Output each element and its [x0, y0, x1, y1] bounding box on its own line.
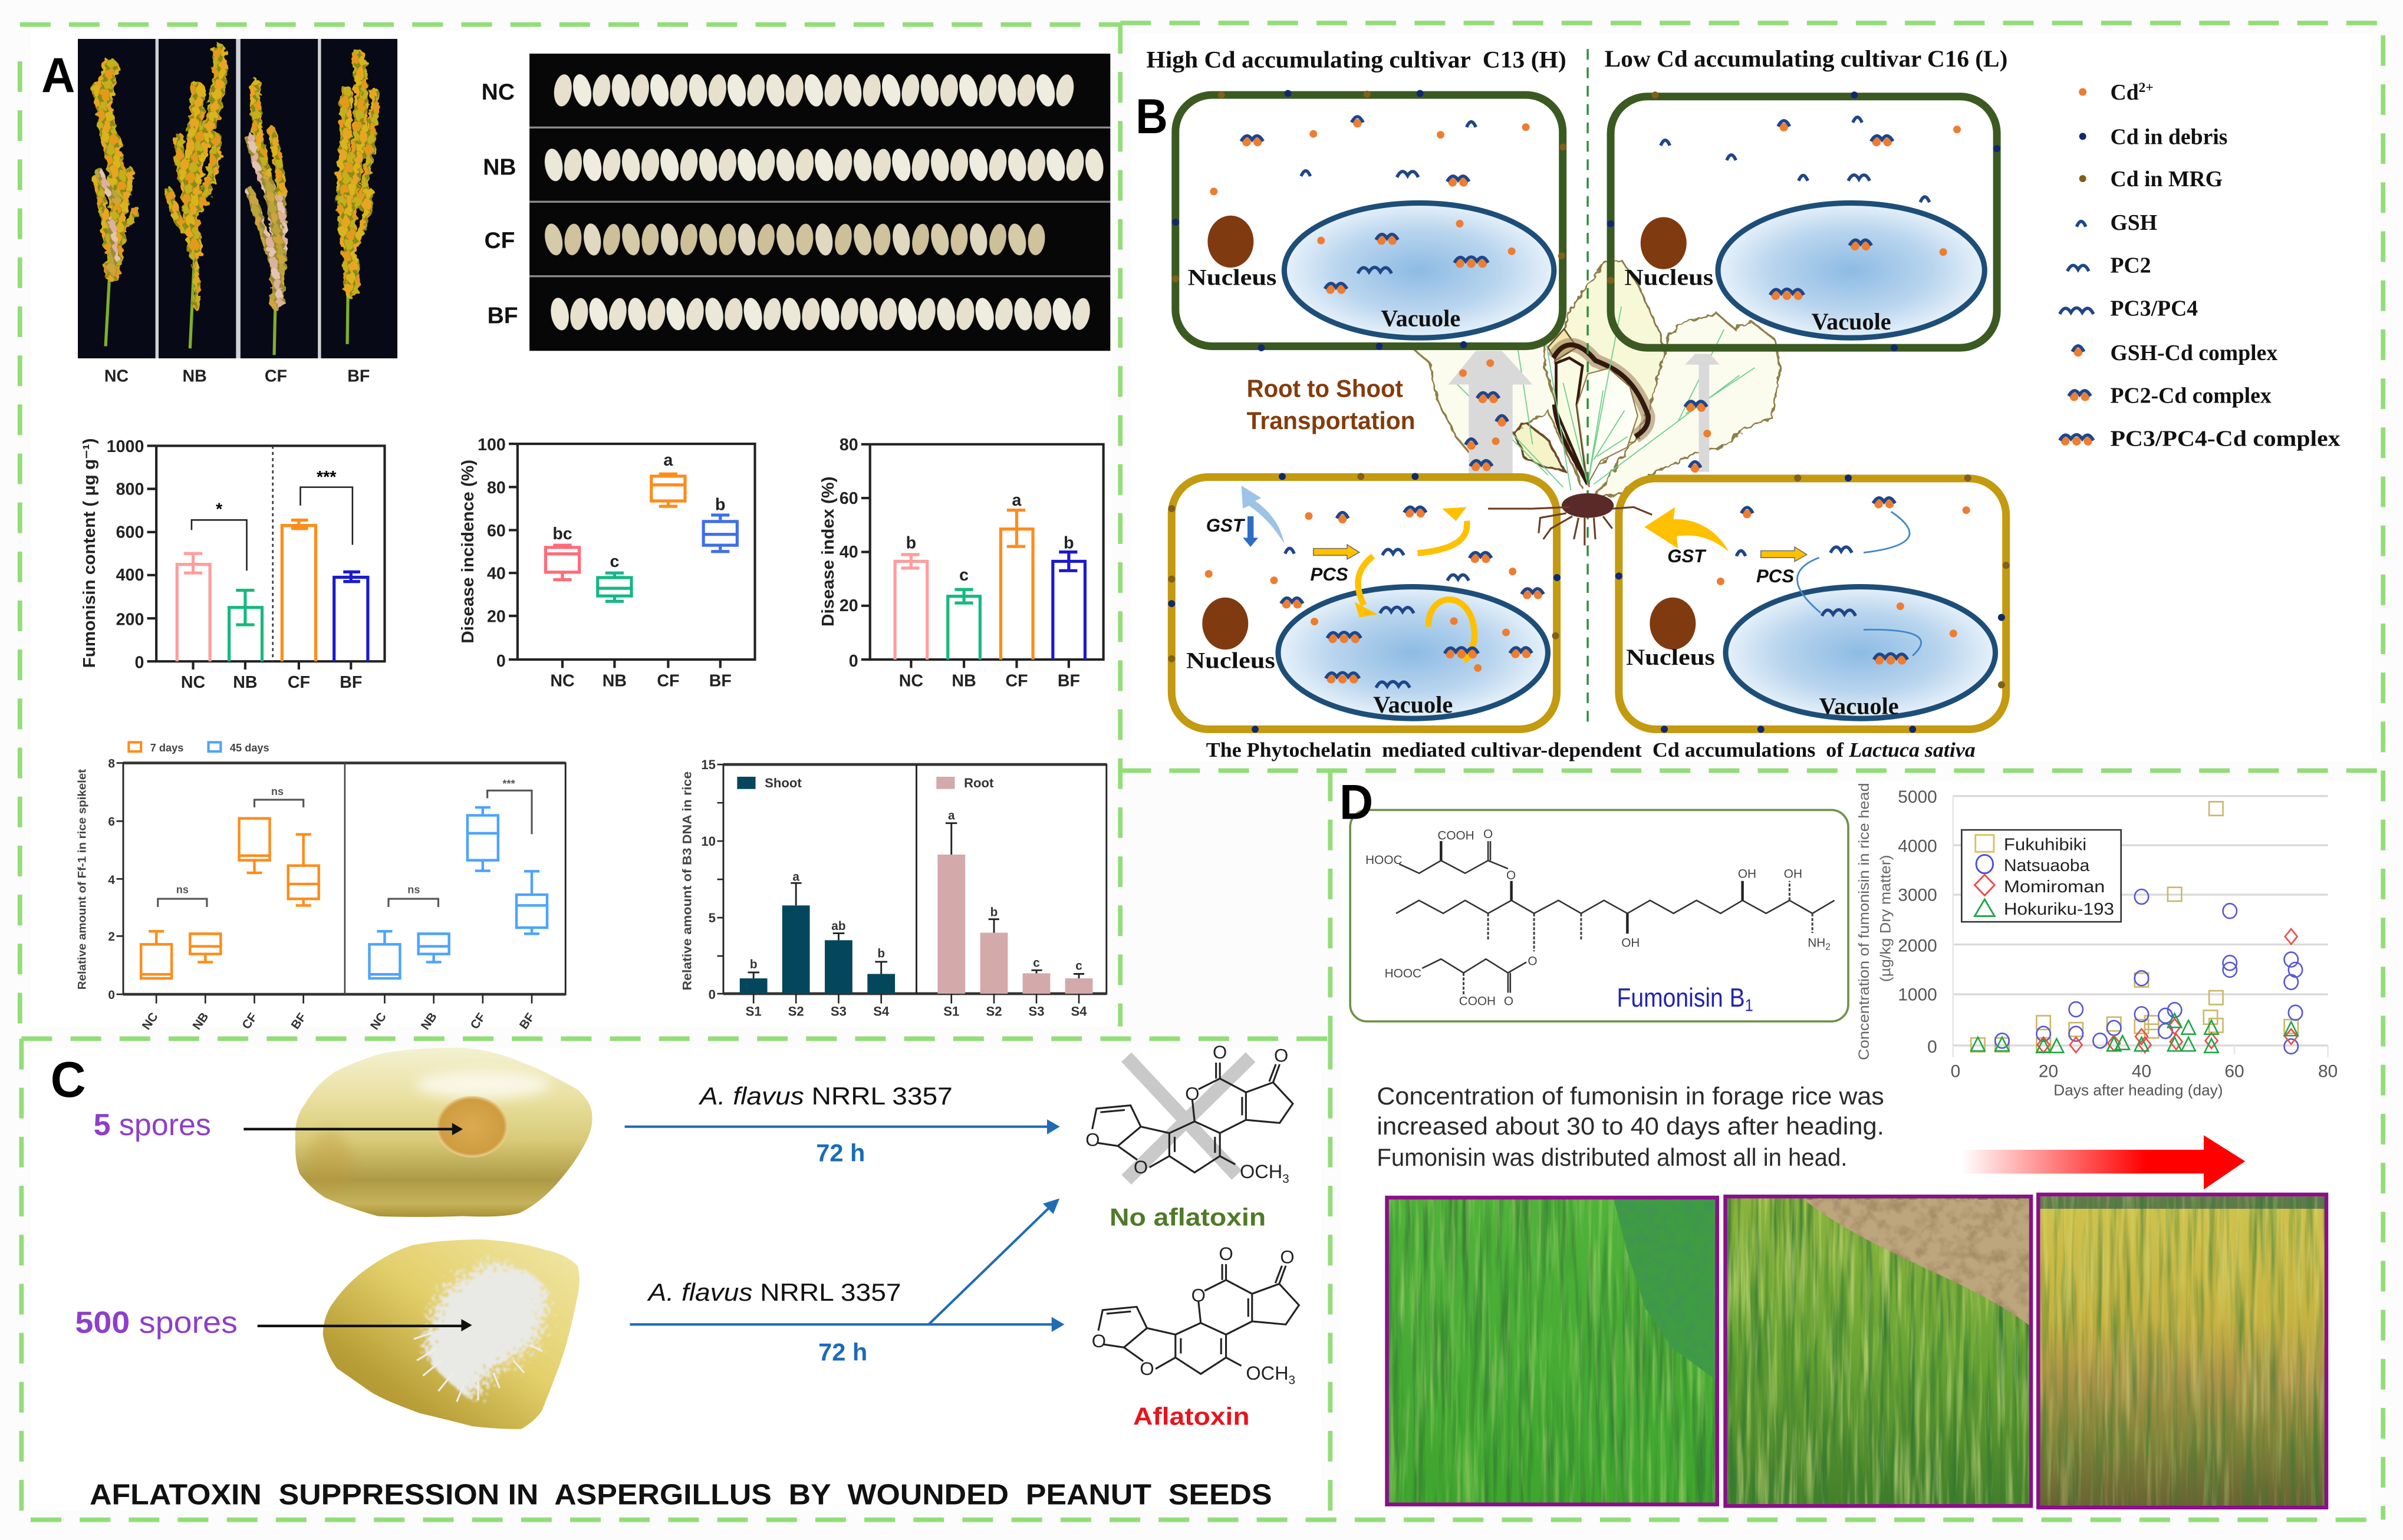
description text: Fumonisin was distributed almost all in head. [1377, 1143, 1847, 1171]
chart: disease incidence box plots: 80 [487, 479, 506, 497]
description text [1377, 1082, 1884, 1171]
chart: relative amount of B3 DNA bars: S1 [746, 1004, 762, 1018]
rice grain row labels: NB [483, 154, 516, 180]
chart: fumonisin content bars: NB [233, 673, 258, 692]
chart: fumonisin concentration scatter: 80 [2318, 1061, 2338, 1081]
photo: ripe rice field [2038, 1195, 2326, 1508]
chart: fumonisin content bars: 400 [116, 566, 144, 585]
PCS label: PCS [1311, 564, 1348, 585]
panel letter C: C [51, 1051, 86, 1108]
structure: aflatoxin, crossed out: O [1213, 1042, 1227, 1063]
chart: disease incidence box plots: Disease incidence (%) [459, 460, 478, 644]
chart: fumonisin concentration scatter: 1000 [1898, 985, 1937, 1004]
chart: relative amount of B3 DNA bars: a [948, 809, 955, 823]
data points: Fukuhibiki [1971, 802, 2298, 1052]
legend: 7 days and 45 days: 7 days [150, 742, 183, 754]
data points: Hokuriku-193 [1971, 1014, 2298, 1053]
chart: disease incidence box plots: c [610, 552, 619, 571]
chart: fumonisin concentration scatter: (µg/kg Dry matter) [1878, 855, 1894, 982]
root to shoot arrow, right [1685, 354, 1720, 472]
chart: relative amount of B3 DNA bars: 0 [709, 987, 716, 1002]
chart: fumonisin content bars: Fumonisin content ( μg g⁻¹) [80, 438, 99, 668]
structure box: fumonisin B1: COOH [1437, 829, 1474, 843]
rice grain row labels: BF [488, 303, 518, 328]
chart: fumonisin concentration scatter: 0 [1927, 1037, 1937, 1057]
PCS label: PCS [1756, 566, 1794, 586]
chart: disease index bars: c [959, 566, 969, 585]
panel C title: AFLATOXIN SUPPRESSION IN ASPERGILLUS BY WOUNDED PEANUT SEEDS [90, 1479, 1272, 1511]
legend: Cd species: Cd [2110, 80, 2139, 105]
chart: relative amount of Ff-1 box plots: Relative amount of Ff-1 in rice spikelet [76, 769, 89, 990]
cell: top left shoot, high Cd: Nucleus [1188, 265, 1276, 291]
chart: fumonisin content bars: *** [317, 468, 337, 487]
panel B: cadmium accumulation in Lactuca sativa [1135, 45, 2341, 761]
chart: relative amount of Ff-1 box plots: NB [419, 1010, 440, 1033]
chart: fumonisin content bars: 200 [116, 611, 144, 629]
structure: aflatoxin: O [1140, 1358, 1154, 1379]
heading: low Cd cultivar: Low Cd accumulating cultivar C16 (L) [1605, 45, 2007, 72]
chart: relative amount of B3 DNA bars: S2 [986, 1004, 1002, 1018]
scatter legend: Momiroman [2004, 878, 2105, 896]
cell: top right shoot, low Cd: Nucleus [1624, 265, 1713, 291]
chart: fumonisin concentration scatter: 2000 [1898, 936, 1937, 955]
panicle labels: NB [182, 367, 207, 385]
chart: relative amount of Ff-1 box plots: ns [271, 786, 284, 797]
chart: relative amount of Ff-1 box plots: *** [502, 778, 516, 790]
structure box: fumonisin B1: O [1483, 827, 1493, 841]
cell: top right shoot, low Cd [1607, 91, 2000, 351]
PCS gold arrow [1761, 547, 1807, 562]
red progression arrow [1961, 1135, 2245, 1189]
GST down arrow [1243, 516, 1258, 547]
chart: relative amount of Ff-1 box plots: NC [368, 1010, 389, 1033]
data points: Momiroman [2037, 929, 2297, 1053]
structure box: fumonisin B1: COOH [1459, 994, 1496, 1008]
label: 5 spores: 5 spores [94, 1108, 211, 1142]
structure: aflatoxin, crossed out: O [1274, 1045, 1288, 1066]
root to shoot arrow, left [1449, 351, 1532, 475]
structure: aflatoxin, crossed out: O [1185, 1083, 1200, 1104]
chart: disease index bars [819, 436, 1104, 691]
label: aflatoxin: Aflatoxin [1133, 1403, 1250, 1430]
cell: bottom left root, high Cd: Vacuole [1373, 691, 1453, 718]
chart: fumonisin content bars: 1000 [107, 437, 144, 456]
chart: fumonisin concentration scatter: 5000 [1898, 787, 1937, 807]
structure box: fumonisin B1 [1350, 810, 1848, 1021]
structure box: fumonisin B1: HOOC [1365, 853, 1403, 867]
chart: disease index bars: 40 [840, 543, 858, 562]
description text: Concentration of fumonisin in forage rice was [1377, 1082, 1884, 1110]
chart: relative amount of B3 DNA bars: b [990, 905, 998, 919]
heading: high Cd cultivar: High Cd accumulating cultivar C13 (H) [1146, 46, 1566, 72]
caption: phytochelatin mediated accumulation: The Phytochelatin mediated cultivar-dependent Cd accumulations of Lactuca sativa [1206, 738, 1976, 761]
chart: fumonisin content bars: * [216, 500, 223, 519]
chart: relative amount of Ff-1 box plots: NC [140, 1010, 161, 1033]
chart: relative amount of B3 DNA bars: S1 [943, 1004, 959, 1018]
large yellow GST arrow [1644, 507, 1729, 552]
chart: fumonisin content bars: BF [340, 673, 362, 692]
scatter legend: Hokuriku-193 [2004, 900, 2114, 919]
legend: shoot and root: Shoot [765, 776, 802, 790]
cell: top left shoot, high Cd: Vacuole [1381, 305, 1460, 332]
Cd complexes moving up the arrows [1459, 360, 1711, 473]
chart: disease incidence box plots: 0 [496, 652, 506, 671]
treatment labels: 72 h [816, 1139, 865, 1166]
chart: disease incidence box plots: a [663, 451, 673, 470]
panicle labels: BF [347, 367, 370, 385]
legend: shoot and root: Root [964, 776, 994, 790]
panel letter A: A [41, 48, 75, 103]
chart: fumonisin content bars: 800 [116, 480, 144, 499]
chart: fumonisin concentration scatter: 20 [2039, 1061, 2058, 1081]
chart: relative amount of Ff-1 box plots: 4 [108, 873, 115, 887]
chart: relative amount of Ff-1 box plots: 6 [108, 815, 115, 829]
chart: relative amount of Ff-1 box plots: 8 [108, 757, 115, 770]
chart: disease incidence box plots: NB [603, 672, 627, 691]
black arrows to seeds [243, 1123, 472, 1331]
photo: wounded peanut seed [295, 1048, 592, 1217]
legend: Cd species: Cd in MRG [2110, 167, 2223, 192]
chart: fumonisin content bars: CF [288, 673, 310, 692]
legend: Cd species: 2+ [2139, 80, 2154, 95]
panel letter D: D [1339, 774, 1373, 829]
chart: relative amount of Ff-1 box plots: BF [517, 1011, 537, 1032]
legend: Cd species: GSH [2110, 210, 2157, 235]
panicle labels: CF [265, 367, 287, 385]
structure: aflatoxin, crossed out: O [1134, 1157, 1148, 1178]
chart: disease incidence box plots: 60 [487, 522, 506, 540]
label: 500 spores: 500 spores [75, 1306, 238, 1340]
structure box: fumonisin B1: 2 [1825, 942, 1831, 952]
structure: aflatoxin, crossed out: O [1085, 1129, 1100, 1150]
chart: fumonisin concentration scatter: 40 [2132, 1061, 2151, 1081]
legend: shoot and root [737, 776, 994, 790]
label: root to shoot transportation: Root to Shoot [1247, 374, 1403, 402]
chart: relative amount of B3 DNA bars: Relative amount of B3 DNA in rice [680, 771, 694, 991]
cultivar divider [1587, 49, 1588, 723]
structure box: fumonisin B1: OH [1784, 868, 1802, 881]
panel C: aflatoxin suppression [51, 1042, 1299, 1511]
structure: aflatoxin: 3 [1289, 1374, 1295, 1387]
legend: Cd species: Cd in debris [2110, 124, 2227, 149]
scatter legend: Natsuaoba [2004, 856, 2090, 875]
structure box: fumonisin B1: OH [1738, 868, 1756, 881]
chart: relative amount of Ff-1 box plots: ns [407, 883, 420, 895]
chart: relative amount of B3 DNA bars: S4 [873, 1004, 890, 1018]
panel A: fumonisin in rice [41, 39, 1110, 1033]
chart: relative amount of B3 DNA bars: b [750, 958, 758, 971]
structure box: fumonisin B1: O [1506, 869, 1516, 882]
chart: disease index bars: Disease index (%) [819, 476, 838, 626]
yellow curved pathways [1358, 521, 1474, 654]
structure: aflatoxin: O [1280, 1246, 1295, 1267]
chart: disease index bars: b [906, 534, 916, 553]
chart: fumonisin concentration scatter: 60 [2224, 1061, 2244, 1081]
chart: relative amount of B3 DNA bars: S4 [1071, 1004, 1087, 1018]
chart: relative amount of B3 DNA bars: c [1033, 956, 1040, 969]
chart: disease incidence box plots: CF [657, 672, 679, 691]
structure box: fumonisin B1: NH [1808, 936, 1825, 949]
thin blue pathways [1798, 512, 1921, 656]
structure box: fumonisin B1: OH [1621, 936, 1640, 949]
structure: aflatoxin: O [1191, 1285, 1206, 1305]
light blue GST arrow [1242, 486, 1284, 544]
chart: relative amount of Ff-1 box plots: BF [288, 1011, 309, 1032]
chart: relative amount of Ff-1 box plots: NB [190, 1010, 211, 1033]
structure: aflatoxin, crossed out [1085, 1042, 1293, 1186]
structure box: fumonisin B1: O [1528, 955, 1538, 968]
treatment labels: A. flavus NRRL 3357 [698, 1082, 953, 1110]
chart: disease index bars: 20 [840, 596, 858, 615]
illustration: lettuce plant [1408, 260, 1780, 498]
chart: disease incidence box plots: 100 [478, 436, 506, 454]
chart: fumonisin content bars: 600 [116, 523, 144, 542]
label: root to shoot transportation [1247, 374, 1416, 434]
chart: disease incidence box plots: BF [709, 672, 732, 691]
chart: relative amount of Ff-1 box plots: 2 [108, 930, 115, 944]
chart: disease incidence box plots: 20 [487, 607, 506, 626]
chart: relative amount of B3 DNA bars: S3 [1029, 1004, 1045, 1018]
lettuce roots [1488, 493, 1652, 545]
rice grain row labels: CF [484, 228, 515, 253]
structure: aflatoxin: O [1219, 1244, 1233, 1264]
photo: four rice panicles [78, 39, 397, 358]
chart: disease incidence box plots: NC [550, 672, 575, 691]
chart: relative amount of B3 DNA bars [680, 757, 1107, 1018]
legend: Cd species: PC2 [2110, 253, 2151, 278]
chart: fumonisin content bars: 0 [134, 653, 144, 672]
photo: rice grains rows [529, 54, 1110, 351]
chart: fumonisin concentration scatter: Days after heading (day) [2053, 1081, 2223, 1099]
chart: disease index bars: BF [1058, 672, 1080, 691]
cell: bottom right root, low Cd: Nucleus [1626, 645, 1715, 670]
chart: relative amount of Ff-1 box plots: CF [239, 1011, 260, 1032]
chart: relative amount of B3 DNA bars: b [877, 947, 885, 961]
legend: Cd species: PC2-Cd complex [2110, 384, 2272, 408]
panicle labels: NC [104, 367, 129, 385]
chart: relative amount of Ff-1 box plots: 0 [108, 988, 115, 1002]
treatment labels [646, 1082, 953, 1366]
chart: relative amount of Ff-1 box plots: ns [176, 883, 189, 895]
chart: fumonisin concentration scatter: Concentration of fumonisin in rice head [1856, 783, 1872, 1060]
GST label: GST [1206, 515, 1246, 536]
legend: 7 days and 45 days [129, 742, 269, 754]
chart: fumonisin concentration scatter: 0 [1951, 1061, 1960, 1081]
label: Fumonisin B1: Fumonisin B [1617, 984, 1762, 1013]
rice grain row labels: NC [482, 80, 515, 105]
chart: disease index bars: CF [1005, 672, 1028, 691]
legend: Cd species: PC3/PC4-Cd complex [2110, 426, 2341, 451]
legend: Cd species [2060, 80, 2341, 451]
description text: increased about 30 to 40 days after heading. [1377, 1112, 1884, 1140]
chart: disease incidence box plots: bc [552, 525, 572, 543]
chart: fumonisin content bars: NC [181, 673, 205, 692]
chart: relative amount of B3 DNA bars: S3 [831, 1004, 847, 1018]
chart: relative amount of B3 DNA bars: 15 [701, 757, 716, 772]
PCS gold arrow [1314, 545, 1359, 559]
label: root to shoot transportation: Transportation [1247, 407, 1416, 434]
chart: disease index bars: NB [952, 672, 976, 691]
photo: heading rice field [1726, 1196, 2031, 1506]
photo: green rice field [1387, 1198, 1720, 1505]
chart: fumonisin concentration scatter: 3000 [1898, 885, 1937, 905]
chart: relative amount of B3 DNA bars: a [792, 870, 799, 884]
photo: peanut seed with mold [323, 1239, 580, 1429]
chart: relative amount of B3 DNA bars: 10 [701, 834, 716, 849]
cell: top left shoot, high Cd [1172, 90, 1566, 351]
chart: fumonisin concentration scatter [1856, 783, 2338, 1099]
panel D: fumonisin in forage rice [1339, 774, 2338, 1508]
structure: aflatoxin, crossed out: 3 [1282, 1172, 1289, 1186]
chart: relative amount of Ff-1 box plots [76, 742, 565, 1033]
chart: relative amount of B3 DNA bars: S2 [788, 1004, 804, 1018]
chart: relative amount of B3 DNA bars: c [1075, 959, 1082, 972]
cell: bottom left root, high Cd [1168, 473, 1561, 733]
structure: aflatoxin: OCH [1246, 1363, 1289, 1384]
scatter legend [1961, 830, 2121, 922]
rice grain row labels [482, 80, 518, 328]
cell: bottom right root, low Cd [1615, 474, 2010, 733]
panicle labels [104, 367, 370, 385]
structure box: fumonisin B1: O [1504, 994, 1513, 1008]
cell: bottom left root, high Cd: Nucleus [1186, 648, 1275, 673]
label: Fumonisin B1: 1 [1745, 997, 1753, 1015]
treatment labels: A. flavus NRRL 3357 [646, 1278, 901, 1306]
cell: top right shoot, low Cd: Vacuole [1812, 308, 1891, 335]
panel letter B: B [1135, 89, 1168, 144]
chart: fumonisin content bars [80, 437, 384, 692]
structure: aflatoxin: O [1092, 1331, 1106, 1351]
chart: relative amount of Ff-1 box plots: CF [468, 1011, 488, 1032]
cell: bottom right root, low Cd: Vacuole [1819, 692, 1899, 719]
chart: disease index bars: 0 [849, 652, 858, 671]
chart: fumonisin concentration scatter: 4000 [1898, 836, 1937, 856]
chart: disease incidence box plots: b [715, 496, 725, 515]
data points: Natsuaoba [1995, 889, 2302, 1054]
chart: disease incidence box plots: 40 [487, 565, 506, 583]
scatter legend: Fukuhibiki [2004, 836, 2086, 855]
label: no aflatoxin: No aflatoxin [1110, 1203, 1266, 1231]
chart: disease index bars: b [1064, 534, 1074, 553]
chart: disease incidence box plots [459, 436, 755, 691]
structure box: fumonisin B1: HOOC [1385, 967, 1421, 980]
legend: Cd species: PC3/PC4 [2110, 296, 2198, 321]
chart: disease index bars: NC [899, 672, 923, 691]
chart: relative amount of B3 DNA bars: ab [831, 919, 846, 933]
legend: 7 days and 45 days: 45 days [230, 742, 269, 754]
cells [1168, 90, 2010, 733]
structure: aflatoxin, crossed out: OCH [1240, 1161, 1282, 1182]
treatment labels: 72 h [818, 1338, 867, 1366]
legend: Cd species: GSH-Cd complex [2110, 341, 2277, 365]
chart: disease index bars: a [1012, 491, 1022, 510]
chart: disease index bars: 60 [840, 489, 858, 508]
chart: disease index bars: 80 [840, 436, 858, 454]
GST label: GST [1667, 546, 1707, 566]
blue reaction arrows [625, 1122, 1062, 1330]
structure: aflatoxin [1092, 1244, 1299, 1387]
chart: relative amount of B3 DNA bars: 5 [709, 911, 716, 925]
